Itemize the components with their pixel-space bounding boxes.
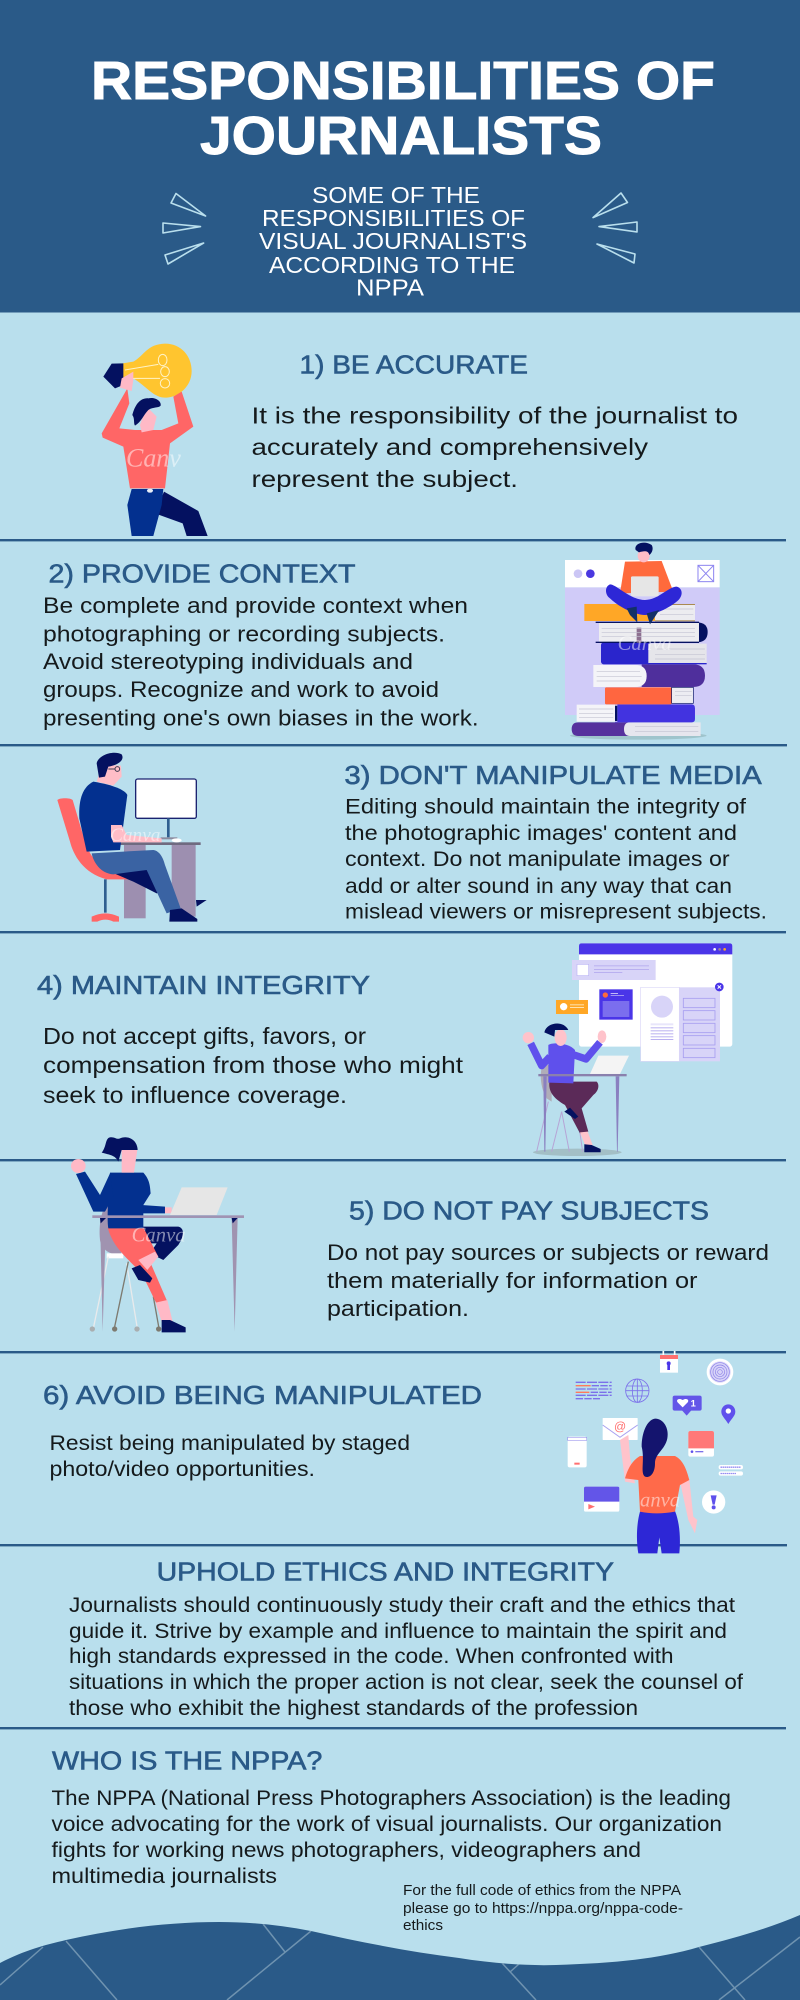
heading: avoid being manipulated: 6) AVOID BEING MANIPULATED [43, 1380, 482, 1410]
panel: 6 avoid being manipulated [0, 1351, 787, 1553]
note: link to code of ethics: please go to https://nppa.org/nppa-code- [403, 1901, 683, 1917]
body text: uphold ethics: those who exhibit the highest standards of the profession [69, 1697, 638, 1720]
icon: left sparkle burst [163, 194, 206, 264]
subtitle: RESPONSIBILITIES OF [262, 205, 525, 231]
subtitle: SOME OF THE [312, 182, 480, 208]
body text: avoid being manipulated: Resist being manipulated by staged [50, 1432, 410, 1455]
body text: be accurate: accurately and comprehensively [252, 434, 649, 460]
body text: do not pay subjects [327, 1240, 769, 1321]
icon: woman at laptop on table: Canva [132, 1225, 186, 1247]
body text: don't manipulate media: add or alter sound in any way that can [345, 875, 732, 898]
body text: uphold ethics: high standards expressed in the code. When confronted with [69, 1645, 674, 1668]
body text: avoid being manipulated [50, 1432, 410, 1481]
body text: maintain integrity: compensation from those who might [43, 1052, 464, 1078]
icon: right sparkle burst [593, 193, 637, 263]
title: RESPONSIBILITIES OF [91, 51, 715, 111]
icon: person on stack of books [565, 543, 720, 740]
heading: be accurate: 1) BE ACCURATE [300, 350, 528, 380]
note: link to code of ethics [403, 1883, 683, 1934]
panel: 3 don't manipulate media [0, 746, 787, 931]
body text: be accurate: It is the responsibility of the journalist to [252, 402, 738, 428]
heading: provide context: 2) PROVIDE CONTEXT [48, 559, 356, 589]
body text: do not pay subjects: them materially for information or [327, 1268, 698, 1293]
title: JOURNALISTS [200, 106, 602, 166]
note: link to code of ethics: ethics [403, 1918, 443, 1934]
title [91, 51, 715, 166]
body text: provide context: presenting one's own biases in the work. [43, 706, 479, 731]
body text: who is the nppa: fights for working news photographers, videographers and [52, 1839, 641, 1862]
body text: provide context: Avoid stereotyping individuals and [43, 649, 413, 674]
icon: woman among digital icons: anva [640, 1490, 680, 1512]
icon: woman at laptop on table [71, 1137, 244, 1332]
body text: don't manipulate media: mislead viewers or misrepresent subjects. [345, 901, 767, 924]
body text: who is the nppa: The NPPA (National Press Photographers Association) is the leading [52, 1787, 731, 1810]
subtitle [259, 182, 527, 300]
body text: maintain integrity [43, 1023, 464, 1108]
panel: 4 maintain integrity [0, 933, 786, 1159]
panel: 5 do not pay subjects [0, 1137, 786, 1351]
heading: don't manipulate media: 3) DON'T MANIPULATE MEDIA [344, 760, 762, 790]
body text: provide context: Be complete and provide context when [43, 593, 468, 618]
subtitle: ACCORDING TO THE [269, 252, 515, 278]
body text: uphold ethics [69, 1594, 743, 1720]
icon: man lifting light bulb [102, 344, 208, 536]
body text: do not pay subjects: Do not pay sources or subjects or reward [327, 1240, 769, 1265]
body text: avoid being manipulated: photo/video opportunities. [50, 1458, 315, 1481]
body text: uphold ethics: guide it. Strive by example and influence to maintain the spirit and [69, 1620, 727, 1643]
icon: man at desktop computer [57, 753, 207, 922]
note: link to code of ethics: For the full code of ethics from the NPPA [403, 1883, 681, 1899]
footer wave [0, 1915, 800, 2000]
heading: uphold ethics and integrity: UPHOLD ETHICS AND INTEGRITY [157, 1557, 614, 1587]
body text: be accurate: represent the subject. [252, 466, 518, 492]
panel: header banner [0, 0, 800, 312]
panel: uphold ethics and integrity [0, 1547, 787, 1727]
icon: man at desktop computer: Canva [110, 825, 160, 846]
icon: woman among digital icons: 1 [691, 1399, 696, 1409]
body text: uphold ethics: Journalists should continuously study their craft and the ethics that [69, 1594, 735, 1617]
body text: be accurate [252, 402, 738, 492]
icon: woman at desk with browser window [523, 943, 732, 1156]
body text: do not pay subjects: participation. [327, 1296, 469, 1321]
body text: provide context [43, 593, 479, 731]
body text: who is the nppa [52, 1787, 731, 1888]
icon: woman among digital icons [568, 1351, 743, 1553]
subtitle: NPPA [356, 274, 425, 300]
heading: do not pay subjects: 5) DO NOT PAY SUBJECTS [349, 1195, 709, 1225]
body text: don't manipulate media: the photographic images' content and [345, 822, 737, 845]
body text: provide context: photographing or recording subjects. [43, 622, 445, 647]
body text: maintain integrity: seek to influence coverage. [43, 1082, 347, 1108]
subtitle: VISUAL JOURNALIST'S [259, 228, 527, 254]
panel: 2 provide context [0, 541, 787, 744]
panel: who is the nppa [0, 1729, 786, 1939]
icon: woman among digital icons: @ [614, 1420, 626, 1434]
body text: who is the nppa: voice advocating for the work of visual journalists. Our organization [52, 1813, 722, 1836]
body text: uphold ethics: situations in which the proper action is not clear, seek the counsel of [69, 1671, 743, 1694]
heading: maintain integrity: 4) MAINTAIN INTEGRITY [37, 970, 370, 1000]
body text: who is the nppa: multimedia journalists [52, 1865, 277, 1888]
icon: person on stack of books: Canva [618, 633, 672, 655]
icon: man lifting light bulb: Canv [126, 444, 181, 473]
heading: who is the nppa: WHO IS THE NPPA? [52, 1746, 322, 1776]
body text: don't manipulate media [345, 796, 767, 924]
body text: don't manipulate media: context. Do not manipulate images or [345, 848, 730, 871]
body text: don't manipulate media: Editing should maintain the integrity of [345, 796, 746, 819]
panel: 1 be accurate [0, 313, 786, 539]
body text: maintain integrity: Do not accept gifts, favors, or [43, 1023, 366, 1049]
body text: provide context: groups. Recognize and work to avoid [43, 677, 439, 702]
